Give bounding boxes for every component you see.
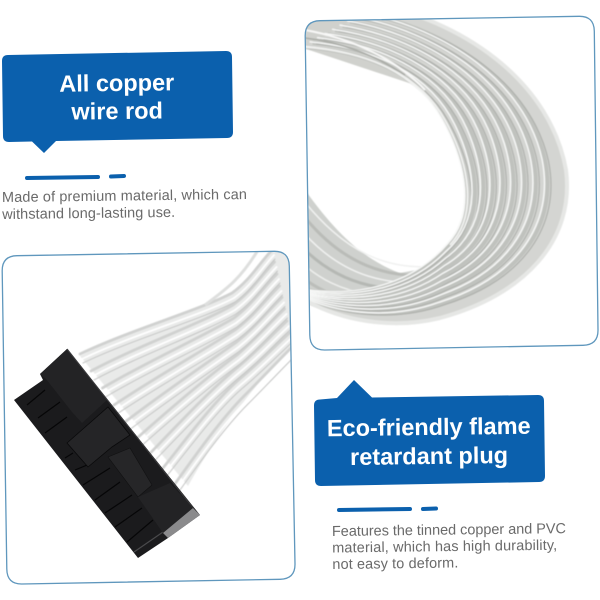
text block: copper description — [1, 187, 247, 223]
heading: eco-friendly flame retardant plug: Eco-friendly flame — [327, 413, 531, 441]
connector: latch clip — [67, 407, 130, 467]
heading: eco-friendly flame retardant plug: retardant plug — [350, 442, 508, 470]
connector: ribs — [27, 349, 193, 552]
text block: plug description: not easy to deform. — [332, 555, 458, 573]
connector: black housing — [14, 349, 200, 558]
wire fan — [80, 250, 295, 497]
connector: grey base strip — [163, 508, 200, 538]
wire coil — [302, 5, 567, 323]
heading: all copper wire rod: All copper — [59, 69, 174, 97]
callout: eco-friendly flame retardant plug — [314, 380, 545, 486]
callout: all copper wire rod — [2, 51, 233, 153]
text block: copper description: withstand long-lasting use. — [1, 205, 175, 223]
text block: copper description: Made of premium material, which can — [2, 187, 247, 206]
connector: end block — [162, 504, 193, 533]
panel border — [2, 251, 295, 584]
heading: all copper wire rod: wire rod — [70, 97, 163, 125]
panel: coiled wire photo — [302, 5, 598, 350]
connector: upper body — [40, 349, 67, 374]
panel: connector photo — [2, 250, 295, 584]
text block: plug description: material, which has high durability, — [332, 538, 557, 556]
connector: embossed logo piece — [108, 448, 152, 497]
accent dashes — [27, 176, 124, 178]
text block: plug description — [332, 521, 566, 573]
accent dashes — [339, 508, 436, 510]
panel border — [305, 16, 598, 350]
text block: plug description: Features the tinned copper and PVC — [332, 521, 566, 540]
